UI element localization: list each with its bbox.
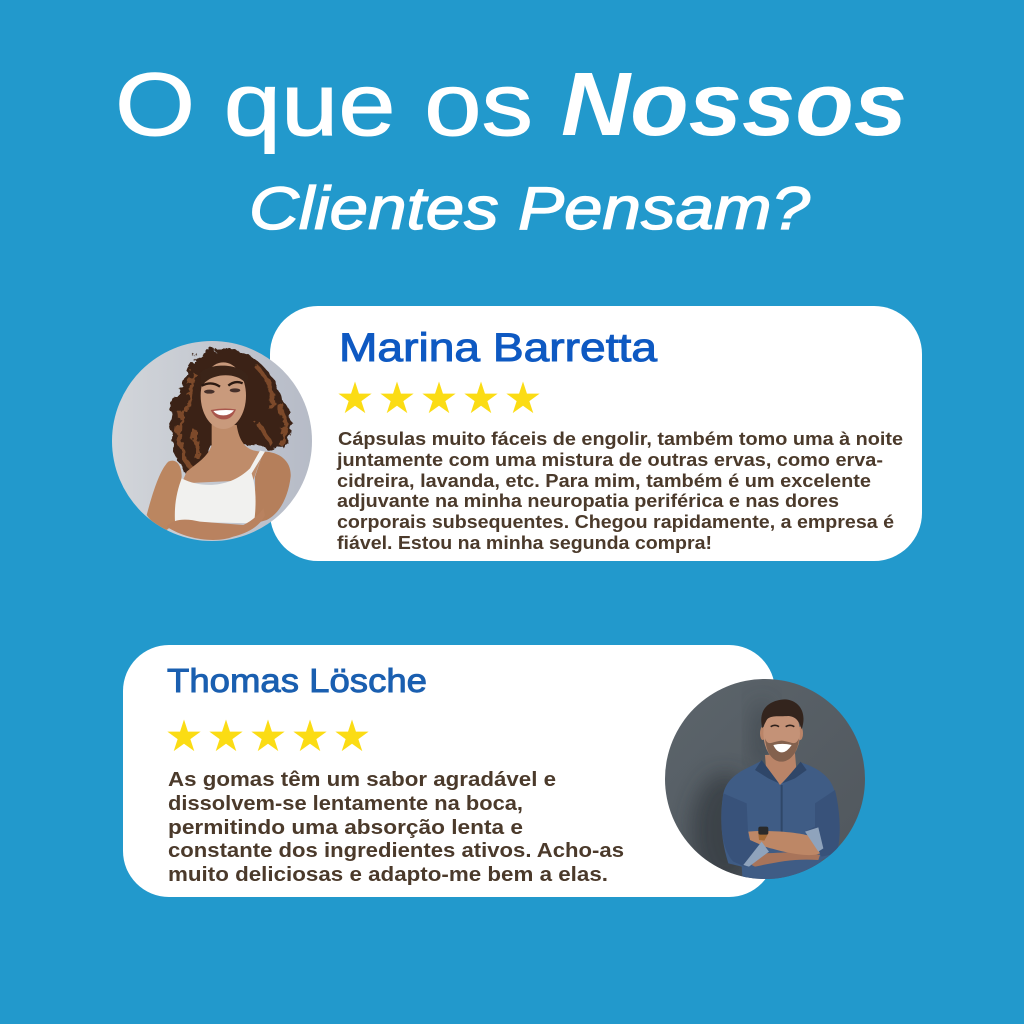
five star rating	[167, 720, 369, 751]
card background	[123, 645, 775, 897]
review text: constante dos ingredientes ativos. Acho-as	[168, 839, 624, 862]
title: O que os	[115, 54, 533, 154]
review text	[168, 768, 624, 886]
review text: As gomas têm um sabor agradável e	[168, 768, 556, 791]
review text: Cápsulas muito fáceis de engolir, também tomo uma à noite	[338, 429, 903, 449]
portrait: smiling man	[665, 679, 865, 879]
review text: juntamente com uma mistura de outras ervas, como erva-	[336, 450, 883, 470]
review text: muito deliciosas e adapto-me bem a elas.	[168, 863, 608, 886]
reviewer name: Marina Barretta	[339, 326, 658, 370]
review text: adjuvante na minha neuropatia periférica e nas dores	[337, 491, 839, 511]
portrait: smiling woman	[112, 341, 312, 541]
five star rating	[338, 382, 540, 413]
review text	[336, 429, 903, 553]
panel: Thomas Lösche review	[123, 645, 875, 897]
title: Clientes Pensam?	[249, 175, 811, 242]
card background	[270, 306, 922, 561]
review text: corporais subsequentes. Chegou rapidamente, a empresa é	[337, 512, 894, 532]
review text: fiável. Estou na minha segunda compra!	[337, 533, 712, 553]
title: Nossos	[561, 55, 907, 155]
panel: Marina Barretta review	[100, 306, 922, 561]
review text: permitindo uma absorção lenta e	[168, 816, 523, 839]
review text: dissolvem-se lentamente na boca,	[168, 792, 523, 815]
title	[115, 54, 907, 242]
review text: cidreira, lavanda, etc. Para mim, também é um excelente	[337, 471, 871, 491]
reviewer name: Thomas Lösche	[167, 662, 427, 699]
